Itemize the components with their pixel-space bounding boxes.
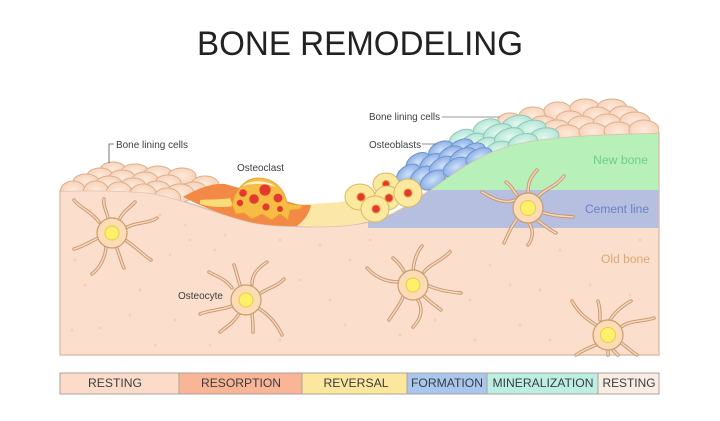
phase: mineralization: [487, 373, 598, 394]
osteocyte 3: [367, 246, 461, 327]
diagram: bone cross-section: [60, 99, 660, 356]
phase: reversal: [302, 373, 407, 394]
phase: resting: RESTING: [88, 378, 142, 390]
phase: formation: FORMATION: [411, 378, 483, 390]
phase: resting: [60, 373, 179, 394]
label: cement line: Cement line: [585, 204, 649, 216]
bone lining cells left: [60, 162, 220, 202]
osteocyte 4: [482, 170, 573, 245]
osteoblasts (yellow, early formation): [345, 173, 427, 222]
label: bone lining cells left: [109, 140, 188, 163]
label: bone lining cells left: Bone lining cells: [116, 140, 188, 151]
label: osteoblasts: Osteoblasts: [369, 140, 421, 151]
bone texture speckles: [70, 208, 642, 346]
bone outline: [60, 133, 659, 355]
phase: mineralization: MINERALIZATION: [492, 378, 594, 390]
label: bone lining cells right: Bone lining cells: [369, 112, 440, 123]
bone matrix layers: [60, 130, 660, 356]
label: osteoclast: Osteoclast: [237, 163, 284, 174]
reversal zone: [297, 200, 395, 227]
osteocyte 5: [572, 301, 654, 355]
mineralizing cells: [448, 114, 560, 157]
osteocyte 2: [200, 262, 284, 335]
label: new bone: New bone: [593, 155, 648, 167]
bone lining cells right: [497, 98, 659, 138]
phase bar: [60, 373, 659, 394]
phase: resting final: [598, 373, 659, 394]
title: BONE REMODELING: [197, 25, 523, 63]
resorption zone: [183, 184, 311, 226]
phase: resting final: RESTING: [602, 378, 656, 390]
osteoblast cells (blue): [396, 138, 492, 190]
phase: reversal: REVERSAL: [324, 378, 389, 390]
phase: resorption: [179, 373, 302, 394]
label: bone lining cells right: [369, 112, 500, 123]
phase: formation: [407, 373, 487, 394]
osteoclast: [200, 178, 303, 220]
label: osteocyte: Osteocyte: [178, 291, 223, 302]
label: old bone: Old bone: [601, 254, 650, 266]
osteocyte 1: [74, 199, 157, 274]
phase: resorption: RESORPTION: [201, 378, 281, 390]
